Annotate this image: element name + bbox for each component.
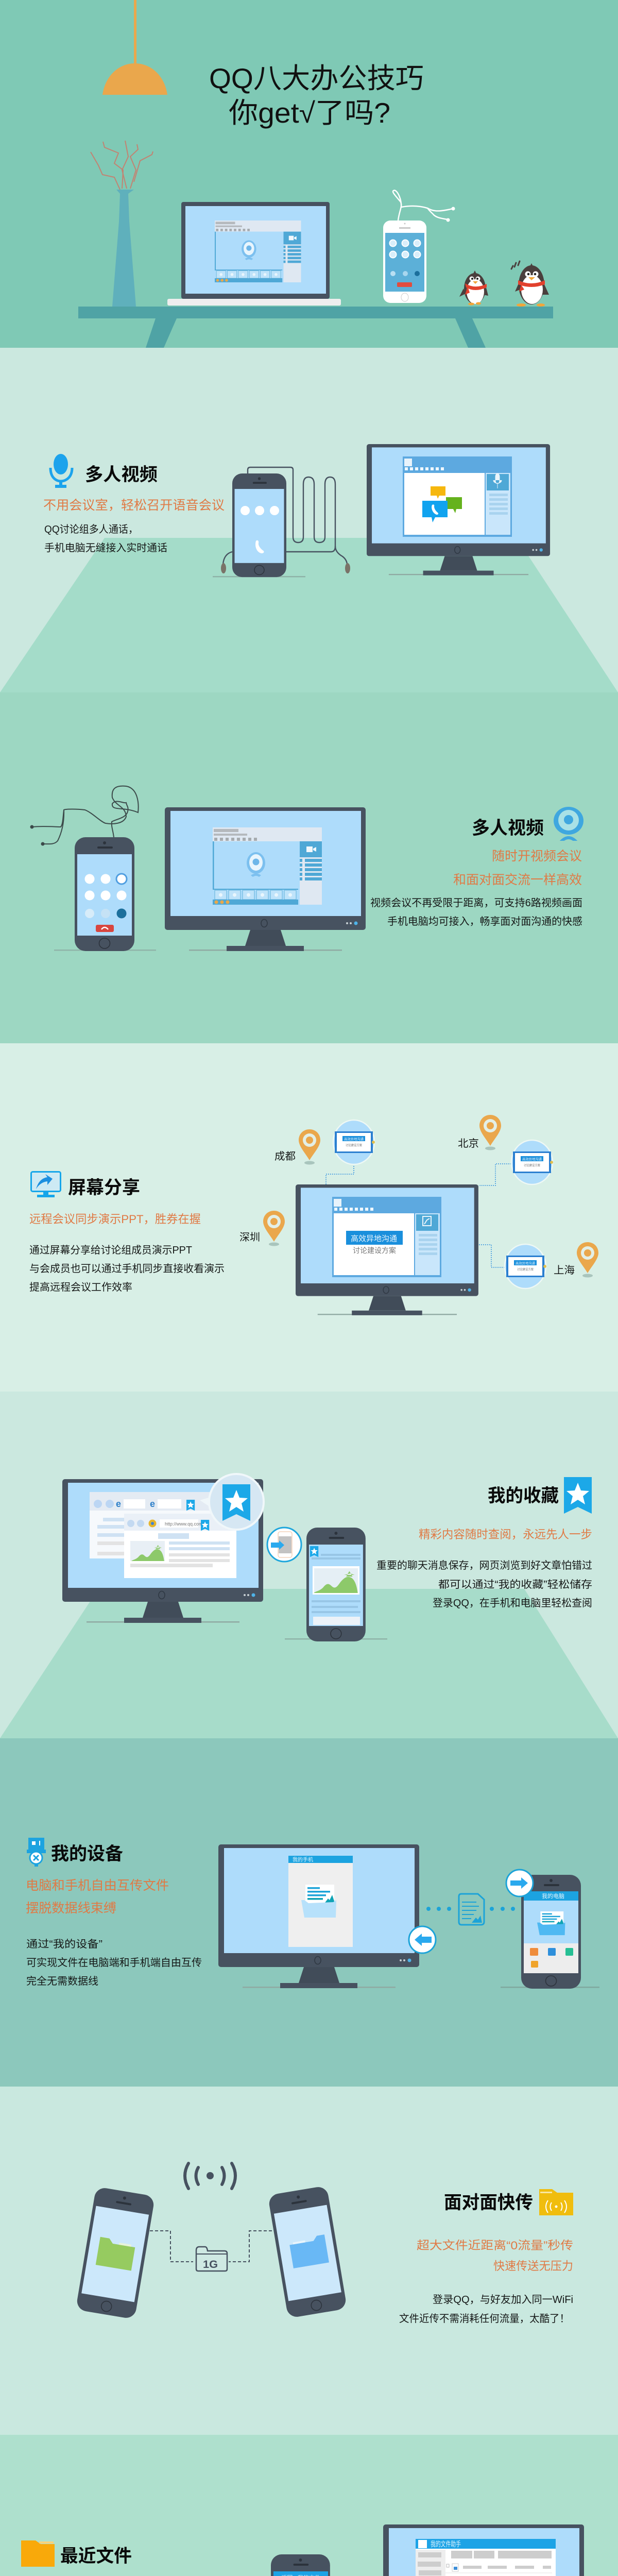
icon: large penguin: [511, 261, 549, 307]
icon: chat bubbles: [422, 486, 462, 522]
cable with earbuds: [30, 786, 139, 846]
icon: webcam: [554, 807, 583, 842]
heading: 我的设备: [51, 1844, 123, 1864]
subheading: 摆脱数据线束缚: [26, 1901, 116, 1916]
body text: 提高远程会议工作效率: [29, 1281, 132, 1293]
subheading: 远程会议同步演示PPT，胜券在握: [29, 1213, 201, 1226]
panel: video conference: [30, 786, 583, 951]
transfer dots and document: [426, 1894, 515, 1925]
subheading: 快速传送无压力: [493, 2260, 573, 2273]
map pin: Beijing: [458, 1115, 553, 1184]
body text: [26, 1938, 202, 1987]
monitor with file list window: [383, 2524, 584, 2576]
icon: yellow folder: [539, 2189, 573, 2215]
monitor with file list window: 我的文件助手: [431, 2540, 461, 2548]
map pin: Shanghai: [505, 1242, 598, 1289]
monitor with video window: [165, 807, 366, 951]
body text: 登录QQ，与好友加入同一WiFi: [433, 2294, 573, 2306]
body text: 与会成员也可以通过手机同步直接收看演示: [29, 1263, 225, 1275]
body text: QQ讨论组多人通话，: [44, 523, 138, 535]
front browser window: [124, 1514, 236, 1578]
body text: 手机电脑无缝接入实时通话: [44, 542, 167, 554]
subheading: 电脑和手机自由互传文件: [26, 1878, 169, 1893]
heading: 多人视频: [472, 818, 544, 838]
heading: 我的收藏: [488, 1486, 559, 1506]
map pin: Shenzhen: 深圳: [239, 1231, 260, 1243]
body text: 手机电脑均可接入，畅享面对面沟通的快感: [387, 916, 582, 927]
icon: wireless signal: [185, 2163, 235, 2189]
arrow circle: to phone: [506, 1870, 533, 1896]
subheading: 不用会议室，轻松召开语音会议: [43, 498, 225, 513]
map pin: Shenzhen: [239, 1211, 285, 1246]
icon: microphone: [50, 454, 72, 488]
heading: 屏幕分享: [68, 1178, 140, 1198]
body text: 通过“我的设备”: [26, 1938, 102, 1950]
body text: 通过屏幕分享给讨论组成员演示PPT: [29, 1244, 192, 1256]
body text: 完全无需数据线: [26, 1975, 98, 1987]
monitor with shared slide: [296, 1184, 478, 1315]
back browser window: e: [116, 1499, 121, 1509]
dashed link: [150, 2231, 272, 2262]
laptop: [167, 202, 341, 306]
back browser window: e: [150, 1499, 155, 1509]
subheading: [417, 2239, 573, 2273]
subheading: 随时开视频会议: [492, 849, 582, 863]
body text: 都可以通过“我的收藏”轻松储存: [438, 1579, 592, 1590]
icon: USB device: [27, 1838, 46, 1867]
heading: 面对面快传: [444, 2193, 533, 2213]
magnifier: bookmark: [200, 1474, 264, 1530]
back browser window: [90, 1492, 213, 1558]
icon: bookmark: [564, 1477, 592, 1514]
panel: hero: [78, 0, 553, 348]
phone with files: 我的电脑: [542, 1892, 564, 1900]
subheading: 超大文件近距离“0流量”秒传: [417, 2239, 573, 2252]
title: QQ八大办公技巧: [209, 62, 424, 94]
phone: [213, 473, 305, 577]
monitor with shared slide: 高效异地沟通: [351, 1234, 397, 1243]
phone: [54, 837, 156, 951]
subheading: [453, 849, 582, 887]
phone with files: [501, 1875, 599, 1989]
subheading: 精彩内容随时查阅，永远先人一步: [419, 1528, 592, 1541]
map pin: Shanghai: 上海: [554, 1264, 575, 1276]
phone with file list: [249, 2554, 347, 2576]
body text: [399, 2294, 573, 2325]
cable with earbuds: [221, 467, 350, 573]
panel: my favourites: [62, 1474, 592, 1641]
body text: 可实现文件在电脑端和手机端自由互传: [26, 1957, 202, 1969]
body text: [44, 523, 167, 554]
icon: vase with branches: [91, 141, 153, 307]
arrow circle to phone: [267, 1528, 301, 1562]
monitor with voice window: [367, 444, 550, 575]
body text: 视频会议不再受限于距离，可支持6路视频画面: [370, 897, 582, 909]
heading: 最近文件: [60, 2546, 132, 2566]
right phone with blue folder: [268, 2185, 347, 2318]
panel: recent files: [21, 2524, 584, 2576]
icon: small penguin: [459, 270, 488, 305]
map pin: Chengdu: 成都: [274, 1150, 296, 1162]
panel: voice conference: [43, 444, 550, 577]
body text: 文件近传不需消耗任何流量，太酷了！: [399, 2313, 570, 2325]
front browser window: http://www.qq.com/: [165, 1521, 204, 1527]
left phone with green folder: [76, 2187, 155, 2319]
map pin: Beijing: 北京: [458, 1138, 479, 1149]
monitor with phone window: [218, 1844, 419, 1988]
subheading: [26, 1878, 169, 1916]
shelf: [78, 307, 553, 348]
arrow circle: to monitor: [409, 1926, 436, 1953]
map pin: Chengdu: [274, 1120, 375, 1164]
title: 你get√了吗?: [229, 97, 390, 129]
body text: [376, 1560, 592, 1609]
white phone with earphones: [383, 190, 455, 303]
monitor with phone window: 我的手机: [293, 1856, 313, 1863]
file badge 1G: 1G: [203, 2259, 218, 2270]
file badge 1G: [196, 2247, 227, 2271]
monitor with shared slide: 讨论建设方案: [353, 1246, 396, 1255]
body text: 重要的聊天消息保存，网页浏览到好文章怕错过: [376, 1560, 592, 1571]
heading: 多人视频: [85, 465, 158, 485]
phone with saved article: [285, 1528, 387, 1641]
dotted connector lines: [326, 1164, 511, 1267]
title: [209, 62, 424, 129]
panel: screen sharing: [29, 1115, 598, 1315]
subheading: 和面对面交流一样高效: [453, 873, 582, 887]
body text: 登录QQ，在手机和电脑里轻松查阅: [433, 1597, 592, 1609]
monitor with browser windows: [62, 1474, 264, 1623]
panel: my device: [26, 1838, 599, 1989]
icon: orange folder: [21, 2540, 55, 2567]
panel: face-to-face transfer: [76, 2163, 573, 2325]
icon: shared screen: [31, 1172, 61, 1197]
body text: [370, 897, 582, 927]
body text: [29, 1244, 225, 1293]
icon: pendant lamp: [102, 0, 167, 95]
